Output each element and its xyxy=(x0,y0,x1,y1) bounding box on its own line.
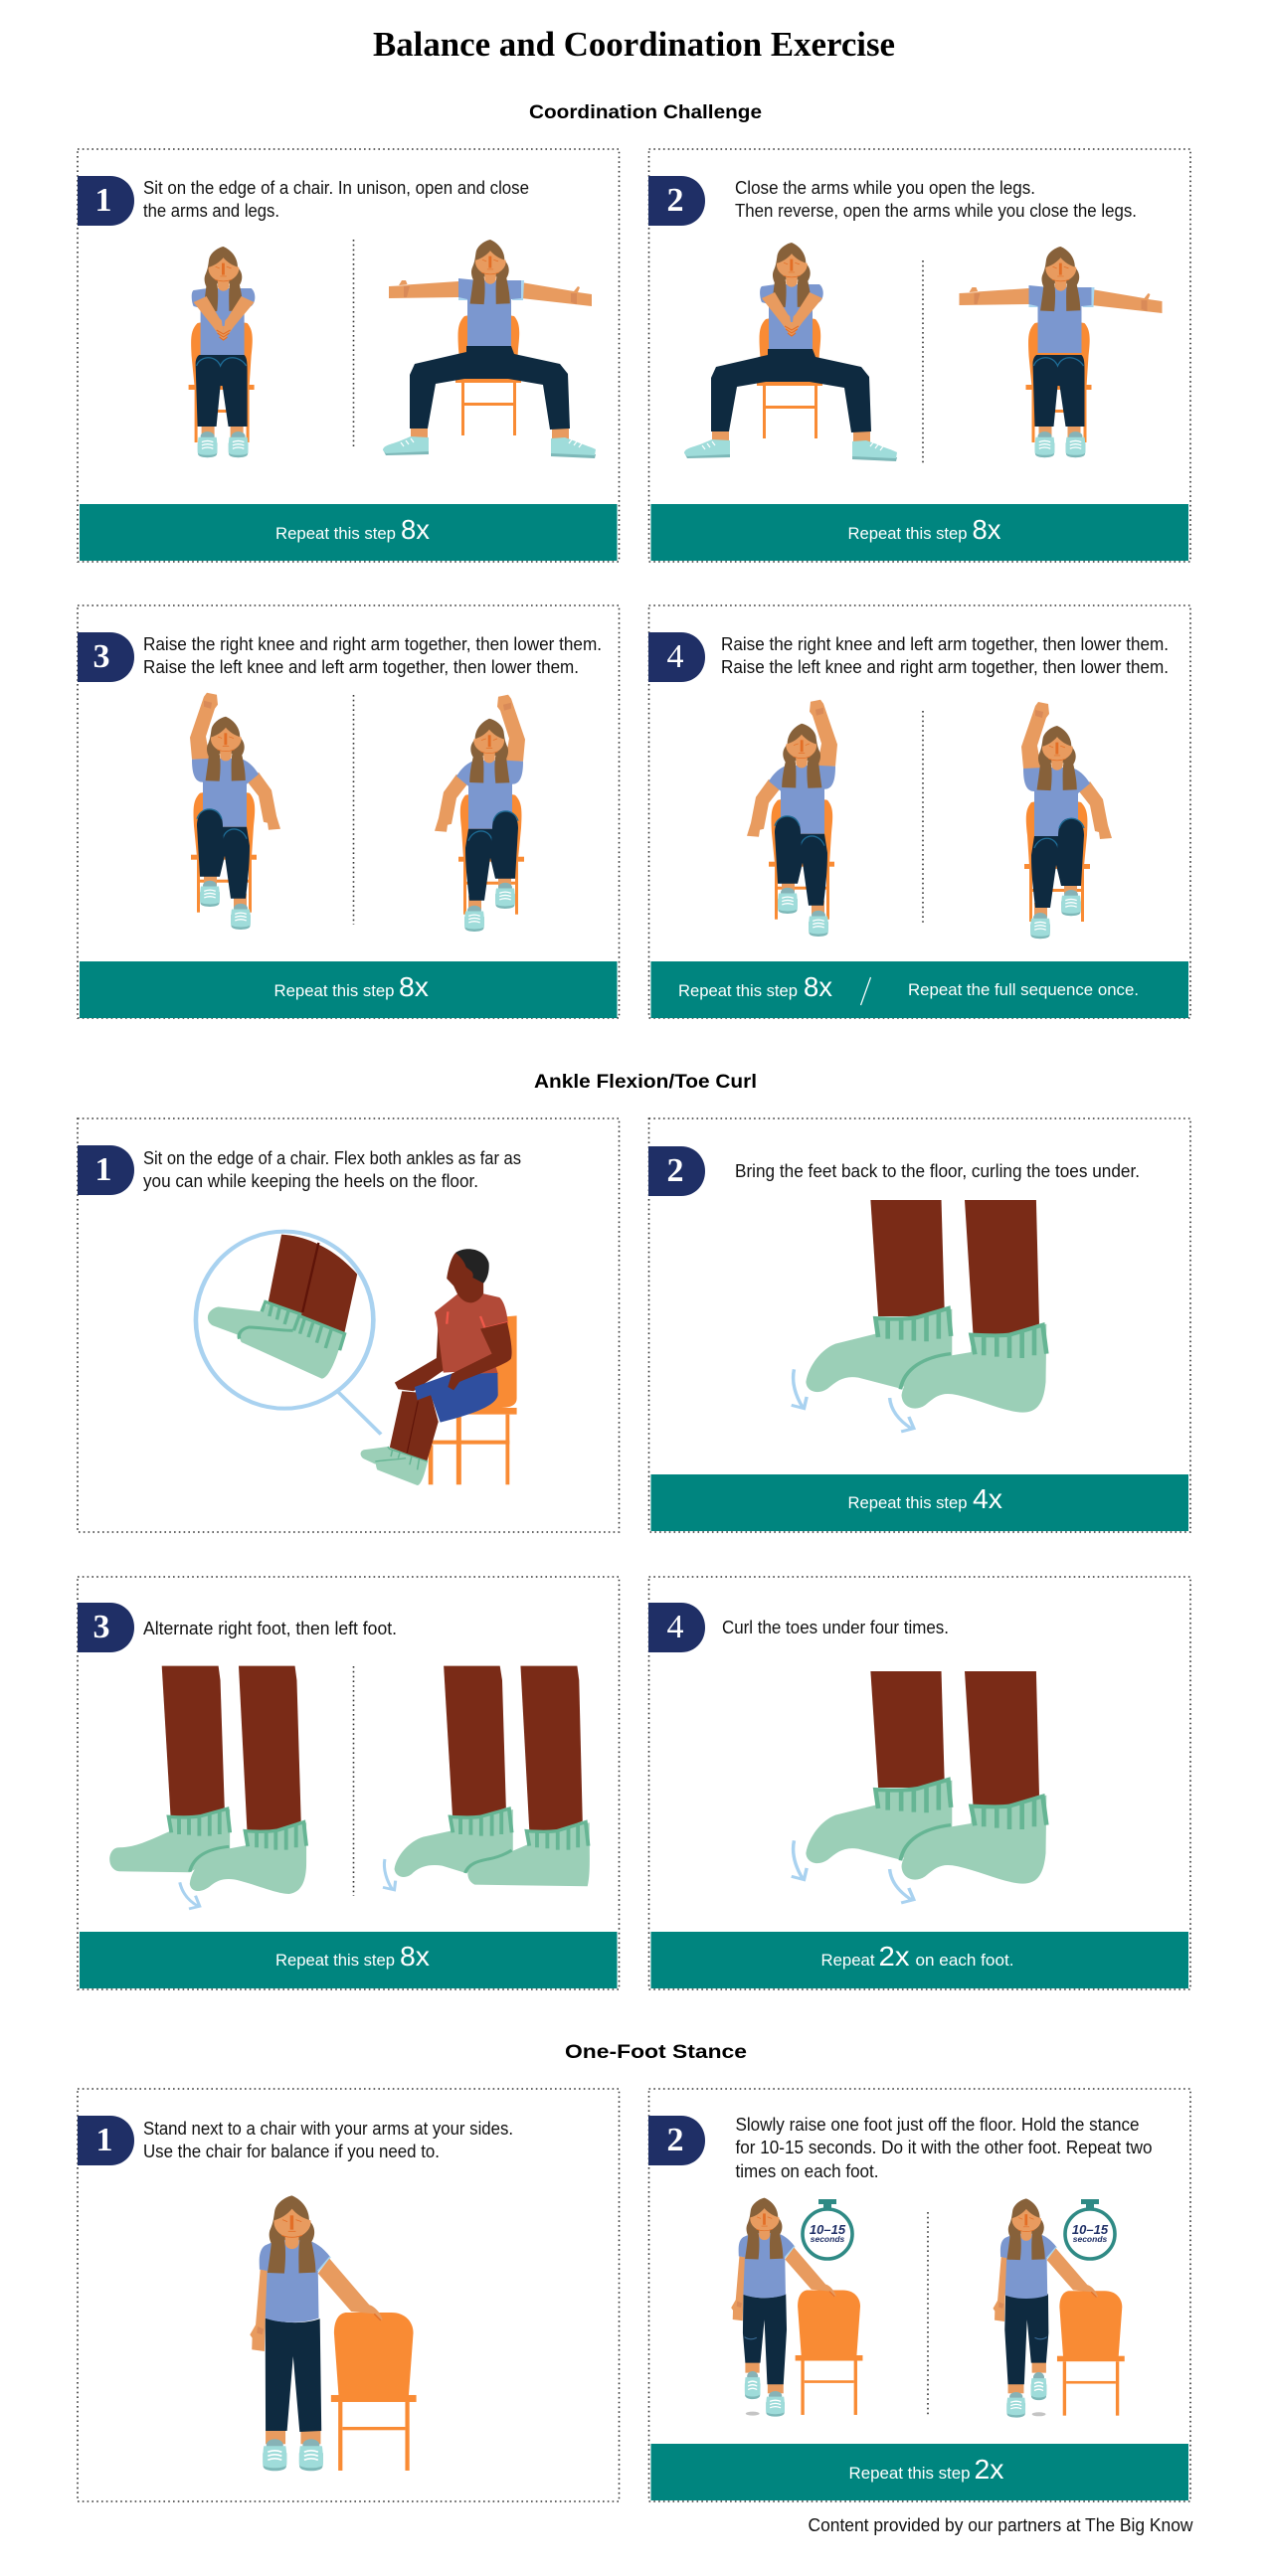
instruction text xyxy=(736,2115,1152,2181)
step badge 1 xyxy=(78,1145,134,1195)
step badge 3 xyxy=(78,632,134,682)
repeat bar: Repeat this step xyxy=(849,2464,971,2483)
instruction text xyxy=(735,178,1137,221)
instruction text xyxy=(143,1148,521,1191)
stopwatch: 10-15 seconds: 10–15 xyxy=(1072,2222,1109,2237)
figure: arms closed legs open xyxy=(684,243,897,461)
stopwatch: 10-15 seconds: seconds xyxy=(811,2234,845,2244)
step badge 4: 4 xyxy=(666,1609,684,1645)
repeat bar: Repeat this step xyxy=(275,524,396,543)
illustration: front foot curled xyxy=(109,1666,306,1909)
step badge 4 xyxy=(648,632,705,682)
repeat bar xyxy=(80,961,617,1018)
figure: seated arms and legs closed xyxy=(189,247,255,457)
repeat bar: on each foot. xyxy=(915,1951,1014,1970)
instruction text: Sit on the edge of a chair. Flex both ankles as far as xyxy=(143,1148,521,1168)
panel: one-foot step 2 xyxy=(648,2089,1190,2501)
instruction text: the arms and legs. xyxy=(143,201,279,221)
figure: right foot raised xyxy=(731,2198,862,2417)
repeat bar xyxy=(650,504,1188,561)
stopwatch: 10-15 seconds: 10–15 xyxy=(810,2222,846,2237)
illustration: seated man with magnified feet xyxy=(196,1232,517,1485)
repeat bar with sequence note: Repeat the full sequence once. xyxy=(908,980,1139,999)
instruction text: Raise the left knee and left arm together, then lower them. xyxy=(143,657,579,677)
panel: coordination step 2 xyxy=(648,149,1190,562)
figure: right knee right arm raised xyxy=(190,693,280,930)
step badge 2 xyxy=(648,2116,705,2165)
panel: coordination step 1 xyxy=(78,149,619,562)
panel: ankle step 3 xyxy=(78,1577,619,1989)
repeat bar: Repeat this step xyxy=(274,981,394,1000)
step badge 2 xyxy=(648,176,705,226)
panel: one-foot step 1 xyxy=(78,2089,619,2501)
repeat bar xyxy=(650,1474,1188,1531)
step badge 3: 3 xyxy=(93,638,109,675)
instruction text: Alternate right foot, then left foot. xyxy=(143,1619,397,1638)
figure: seated arms and legs open xyxy=(383,240,596,458)
instruction text: Bring the feet back to the floor, curling the toes under. xyxy=(735,1161,1140,1181)
instruction text: Sit on the edge of a chair. In unison, open and close xyxy=(143,178,529,198)
step badge 3 xyxy=(78,1603,134,1652)
repeat bar: 4x xyxy=(973,1483,1002,1514)
repeat bar: Repeat xyxy=(821,1951,875,1970)
repeat bar: 8x xyxy=(973,514,1000,545)
heading: One-Foot Stance: One-Foot Stance xyxy=(565,2041,747,2063)
instruction text: Curl the toes under four times. xyxy=(722,1618,949,1637)
instruction text: times on each foot. xyxy=(736,2161,879,2181)
figure: left foot raised xyxy=(993,2198,1125,2418)
step badge 4 xyxy=(648,1603,705,1652)
heading: Ankle Flexion/Toe Curl: Ankle Flexion/Toe Curl xyxy=(534,1071,757,1093)
magnifier with feet xyxy=(196,1232,381,1435)
step badge 3: 3 xyxy=(93,1609,109,1645)
repeat bar: 2x xyxy=(975,2454,1004,2485)
repeat bar: 2x xyxy=(879,1941,909,1972)
instruction text: Close the arms while you open the legs. xyxy=(735,178,1035,198)
seated man xyxy=(361,1249,517,1485)
repeat bar: 8x xyxy=(401,514,430,545)
repeat bar: 8x xyxy=(399,971,429,1002)
credit line: Content provided by our partners at The Big Know xyxy=(808,2515,1193,2535)
instruction text: Then reverse, open the arms while you close the legs. xyxy=(735,201,1137,221)
panel: coordination step 4 xyxy=(648,605,1190,1018)
instruction text: Raise the left knee and right arm together, then lower them. xyxy=(721,657,1169,677)
panel: coordination step 3 xyxy=(78,605,619,1018)
illustration: back foot curled xyxy=(383,1666,590,1890)
instruction text xyxy=(721,634,1169,677)
repeat bar: Repeat this step xyxy=(847,524,967,543)
figure: arms open legs closed xyxy=(959,247,1162,457)
figure: left knee left arm raised xyxy=(435,695,525,932)
step badge 1 xyxy=(78,176,134,226)
instruction text: for 10-15 seconds. Do it with the other foot. Repeat two xyxy=(736,2138,1152,2157)
step badge 1: 1 xyxy=(95,182,111,219)
repeat bar xyxy=(80,1932,617,1988)
illustration: curled feet xyxy=(792,1200,1046,1432)
figure: woman standing beside chair xyxy=(250,2195,417,2471)
figure: right knee left arm raised xyxy=(747,700,837,937)
panel: ankle step 4 xyxy=(648,1577,1190,1989)
step badge 4: 4 xyxy=(666,638,684,675)
repeat bar: Repeat this step xyxy=(275,1951,395,1970)
step badge 2 xyxy=(648,1146,705,1196)
repeat bar: 8x xyxy=(400,1941,430,1972)
instruction text: Stand next to a chair with your arms at your sides. xyxy=(143,2119,513,2139)
instruction text: Raise the right knee and left arm together, then lower them. xyxy=(721,634,1169,654)
title: Balance and Coordination Exercise xyxy=(373,25,895,64)
figure: left knee right arm raised xyxy=(1021,702,1112,939)
illustration: curled feet xyxy=(792,1671,1046,1903)
panel: ankle step 1 xyxy=(78,1118,619,1532)
heading: Coordination Challenge: Coordination Challenge xyxy=(529,101,762,123)
repeat bar: Repeat this step xyxy=(847,1493,967,1512)
repeat bar with sequence note: Repeat this step xyxy=(678,981,798,1000)
instruction text: you can while keeping the heels on the floor. xyxy=(143,1171,478,1191)
panel: ankle step 2 xyxy=(648,1118,1190,1532)
instruction text xyxy=(143,634,602,677)
instruction text xyxy=(143,178,529,221)
stopwatch: 10-15 seconds xyxy=(803,2199,852,2259)
repeat bar xyxy=(650,1932,1188,1988)
step badge 2: 2 xyxy=(666,1152,684,1189)
repeat bar xyxy=(80,504,617,561)
instruction text xyxy=(143,2119,513,2161)
instruction text: Slowly raise one foot just off the floor. Hold the stance xyxy=(736,2115,1140,2135)
repeat bar xyxy=(650,2444,1188,2500)
step badge 1 xyxy=(78,2116,134,2165)
repeat bar with sequence note xyxy=(650,961,1188,1018)
repeat bar with sequence note: 8x xyxy=(804,971,832,1002)
instruction text: Use the chair for balance if you need to. xyxy=(143,2142,440,2161)
stopwatch: 10-15 seconds: seconds xyxy=(1073,2234,1108,2244)
step badge 2: 2 xyxy=(666,182,684,219)
stopwatch: 10-15 seconds xyxy=(1065,2199,1115,2259)
step badge 1: 1 xyxy=(95,1151,111,1188)
instruction text: Raise the right knee and right arm together, then lower them. xyxy=(143,634,602,654)
step badge 2: 2 xyxy=(666,2122,684,2158)
step badge 1: 1 xyxy=(95,2122,113,2158)
